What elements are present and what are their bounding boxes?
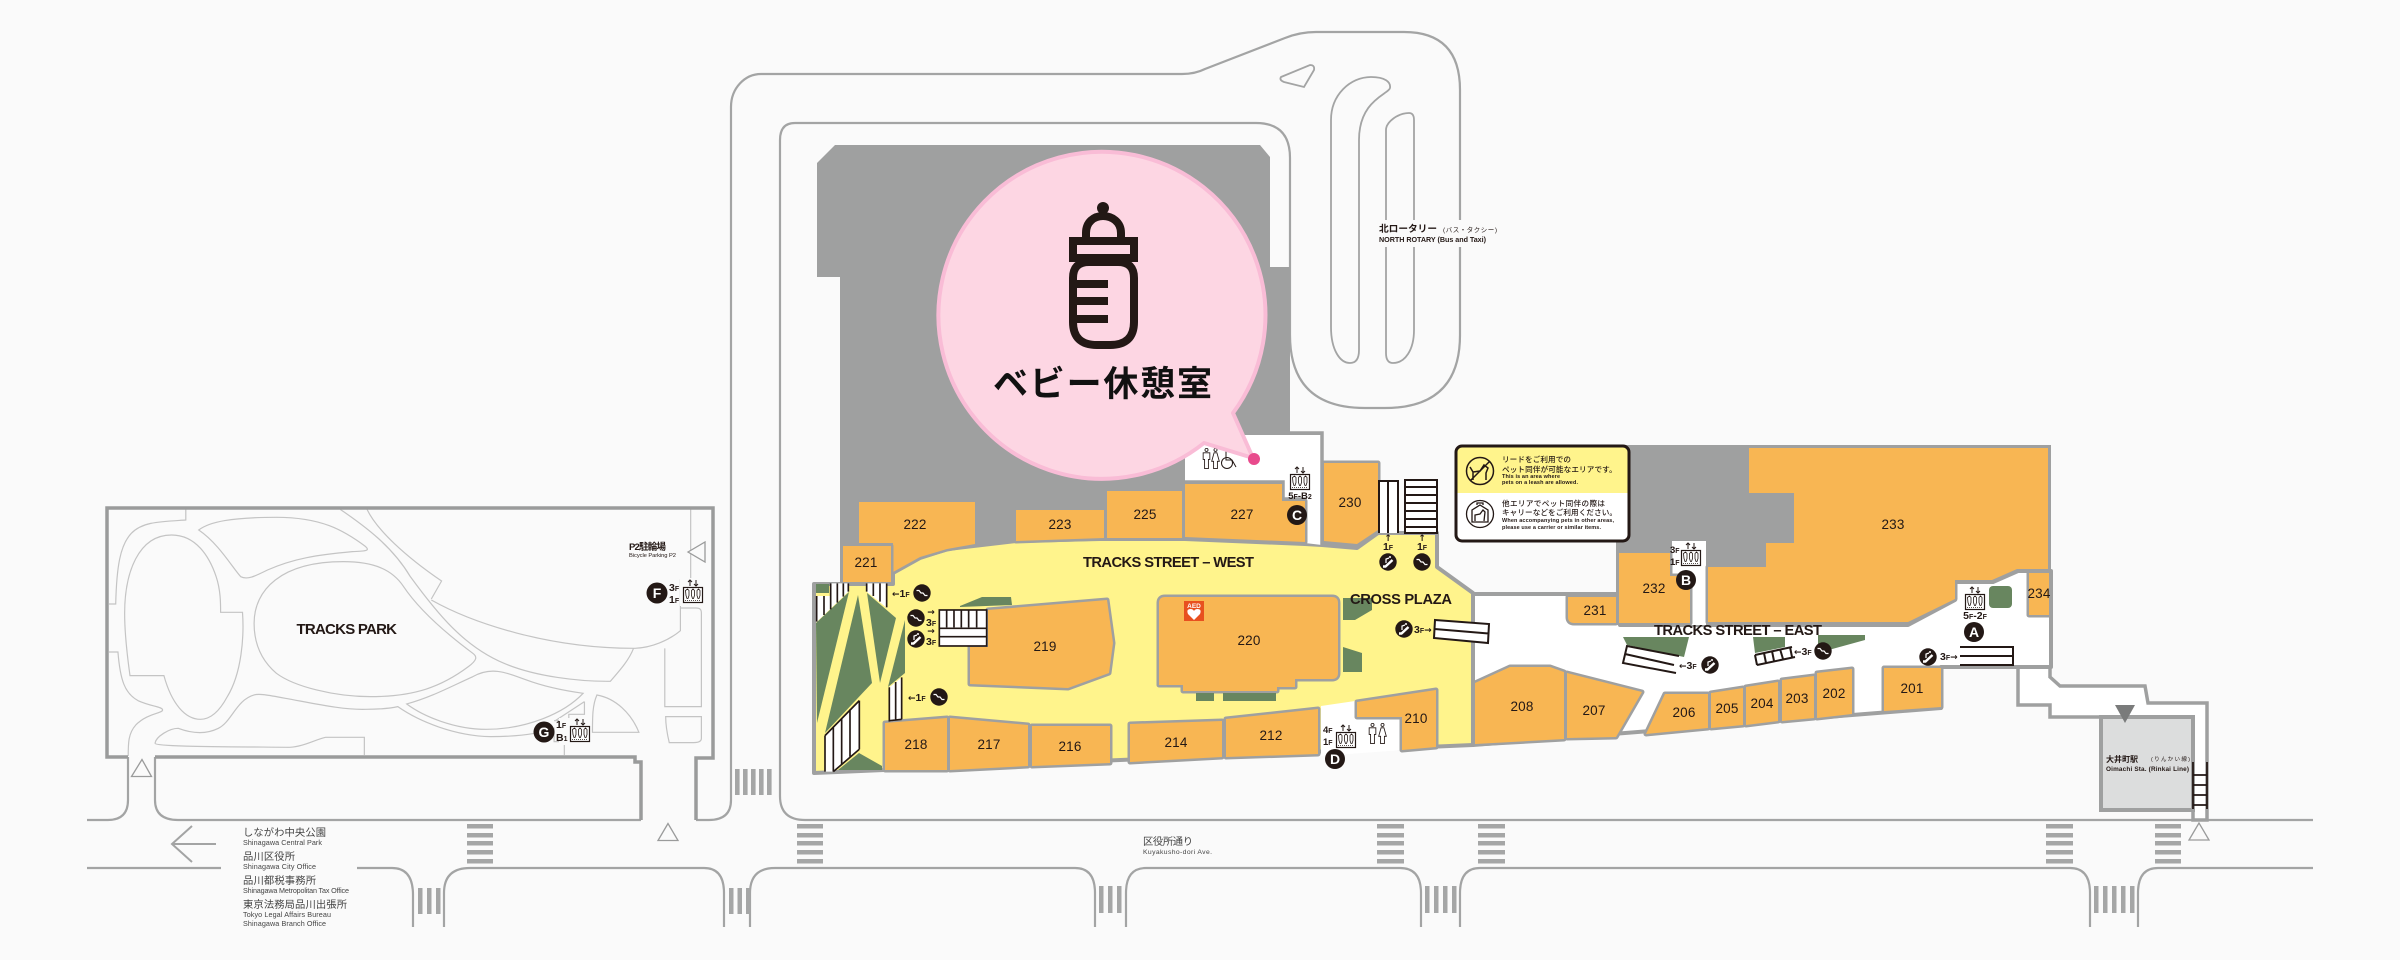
store numbers: 217 — [977, 737, 1001, 752]
top escalator and stairs — [1379, 480, 1437, 533]
store numbers: 222 — [903, 517, 927, 532]
east escalators and stairs — [1434, 620, 2013, 673]
pet legend: ペット同伴が可能なエリアです。 — [1502, 464, 1617, 474]
destination list: Shinagawa Metropolitan Tax Office — [243, 886, 349, 895]
store numbers: 214 — [1164, 735, 1188, 750]
store numbers: 201 — [1900, 681, 1924, 696]
elevator B: 1F — [1670, 557, 1680, 568]
pet legend: キャリーなどをご利用ください。 — [1502, 507, 1617, 517]
store numbers: 227 — [1230, 507, 1254, 522]
service area wall — [1185, 433, 1322, 545]
stores — [843, 448, 2049, 770]
station: Oimachi — [2101, 705, 2193, 810]
north rotary label: (バス・タクシー) — [1443, 225, 1497, 234]
white area D — [1321, 701, 1404, 756]
elevator F: F — [653, 585, 662, 601]
station: Oimachi: (りんかい線) — [2151, 755, 2190, 763]
station: Oimachi: Oimachi Sta. (Rinkai Line) — [2106, 766, 2189, 773]
store numbers: 230 — [1338, 495, 1362, 510]
street labels: TRACKS STREET – WEST — [1083, 555, 1254, 571]
direction labels: → — [927, 608, 935, 618]
elevator G: B1 — [556, 732, 568, 744]
heading: baby room: ベビー休憩室 — [993, 365, 1212, 404]
pet legend: リードをご利用での — [1502, 454, 1571, 464]
elevator G: G — [539, 724, 550, 740]
store numbers: 203 — [1785, 691, 1809, 706]
icon: baby bottle — [1073, 202, 1134, 345]
elevator C: C — [1292, 507, 1302, 523]
elevator D — [1323, 725, 1356, 769]
destination list: 品川都税事務所 — [243, 874, 316, 887]
destination list — [243, 826, 349, 928]
elevator A — [1963, 587, 1988, 642]
elevator F — [646, 578, 703, 606]
store numbers: 234 — [2027, 586, 2051, 601]
direction labels: ↑ — [1384, 534, 1392, 544]
entrance triangles — [132, 542, 2209, 840]
station: Oimachi: 大井町駅 — [2106, 754, 2138, 764]
north rotary label — [1377, 220, 1498, 247]
toilets D — [1369, 723, 1386, 744]
direction labels: ←3F — [1794, 646, 1812, 658]
direction labels: 1F — [1417, 541, 1428, 553]
elevator G — [534, 718, 590, 745]
pet legend: 他エリアでペット同伴の際は — [1502, 498, 1605, 508]
direction labels: 3F — [926, 636, 937, 648]
pet legend: pets on a leash are allowed. — [1502, 480, 1578, 486]
toilets at baby room — [1203, 448, 1236, 469]
store numbers: 232 — [1642, 581, 1666, 596]
AED icon: AED — [1187, 603, 1201, 610]
location dot — [1248, 453, 1260, 465]
store numbers: 218 — [904, 737, 928, 752]
destination list: Shinagawa Branch Office — [243, 919, 326, 928]
direction labels: 3F — [926, 617, 937, 629]
pet legend: This is an area where — [1502, 474, 1560, 480]
destination list: 品川区役所 — [243, 850, 295, 863]
store numbers: 225 — [1133, 507, 1157, 522]
rotary islands — [1280, 65, 1414, 363]
park: outline — [107, 508, 713, 820]
floor circles: escalators — [907, 553, 1937, 674]
direction labels: ←1F — [892, 588, 910, 600]
store numbers: 204 — [1750, 696, 1774, 711]
bicycle parking label — [629, 541, 676, 559]
north rotary label: 北ロータリー — [1379, 223, 1437, 235]
direction labels: 3F→ — [1940, 651, 1958, 663]
street labels — [1083, 555, 1822, 639]
white service area with toilets — [1185, 435, 1322, 545]
destination list: 東京法務局品川出張所 — [243, 898, 347, 911]
store numbers — [854, 495, 2051, 754]
store numbers: 216 — [1058, 739, 1082, 754]
speech bubble — [938, 152, 1265, 479]
store numbers: 231 — [1583, 603, 1607, 618]
pet icon: leash — [1466, 458, 1494, 484]
store numbers: 206 — [1672, 705, 1696, 720]
elevator D: 1F — [1323, 737, 1333, 748]
bicycle parking label: P2駐輪場 — [629, 541, 666, 553]
avenue label — [1143, 835, 1212, 856]
west stairs and escalators — [816, 583, 987, 772]
direction labels: ←3F — [1679, 660, 1697, 672]
station stairs — [2193, 762, 2207, 809]
store numbers: 212 — [1259, 728, 1283, 743]
store numbers: 219 — [1033, 639, 1057, 654]
street labels: CROSS PLAZA — [1350, 592, 1452, 608]
green planters — [816, 584, 2012, 770]
destination list: Tokyo Legal Affairs Bureau — [243, 910, 331, 919]
avenue label: Kuyakusho-dori Ave. — [1143, 849, 1212, 856]
store numbers: 223 — [1048, 517, 1072, 532]
store numbers: 207 — [1582, 703, 1606, 718]
street labels: TRACKS STREET – EAST — [1654, 623, 1822, 639]
store numbers: 220 — [1237, 633, 1261, 648]
store numbers: 205 — [1715, 701, 1739, 716]
station corridor — [2018, 667, 2207, 820]
direction labels: 3F→ — [1414, 624, 1432, 636]
elevator A: A — [1969, 624, 1979, 640]
store numbers: 221 — [854, 555, 878, 570]
elevator C — [1287, 467, 1312, 525]
direction labels: ←1F — [908, 692, 926, 704]
destination list: しながわ中央公園 — [243, 826, 326, 839]
elevator F: 1F — [669, 594, 680, 606]
bicycle parking label: Bicycle Parking P2 — [629, 553, 676, 559]
elevator G: 1F — [556, 719, 567, 731]
elevator B: B — [1681, 572, 1691, 588]
direction labels: → — [927, 627, 935, 637]
elevator A: 5F-2F — [1963, 610, 1988, 622]
gray building blocks — [817, 145, 2051, 630]
elevator B — [1670, 543, 1700, 590]
east floor — [1473, 571, 2051, 745]
pet legend: When accompanying pets in other areas, — [1502, 518, 1614, 524]
pet legend: please use a carrier or similar items. — [1502, 525, 1601, 531]
AED icon — [1184, 601, 1204, 621]
pet icon: carrier — [1466, 500, 1494, 528]
pet legend — [1456, 446, 1629, 541]
store numbers: 202 — [1822, 686, 1846, 701]
elevator C: 5F-B2 — [1288, 491, 1312, 502]
store numbers: 233 — [1881, 517, 1905, 532]
park: paths — [109, 509, 701, 756]
store numbers: 210 — [1404, 711, 1428, 726]
direction labels: ↑ — [1418, 534, 1426, 544]
elevator D: 4F — [1323, 725, 1333, 736]
west floor: yellow street — [814, 533, 1473, 773]
avenue label: 区役所通り — [1143, 835, 1193, 848]
elevator D: D — [1330, 751, 1340, 767]
label: TRACKS PARK: TRACKS PARK — [296, 621, 397, 638]
north rotary label: NORTH ROTARY (Bus and Taxi) — [1379, 235, 1487, 244]
destination list: Shinagawa City Office — [243, 862, 316, 871]
destination list: Shinagawa Central Park — [243, 838, 322, 847]
crosswalks — [418, 769, 2181, 914]
direction labels: 1F — [1383, 541, 1394, 553]
elevator B corridor — [1672, 541, 1706, 625]
elevator F: 3F — [669, 582, 680, 594]
direction labels — [892, 534, 1958, 704]
store numbers: 208 — [1510, 699, 1534, 714]
floor circles: stairs — [907, 553, 1832, 706]
arrow left to destinations — [172, 826, 216, 862]
elevator B: 3F — [1670, 545, 1680, 556]
